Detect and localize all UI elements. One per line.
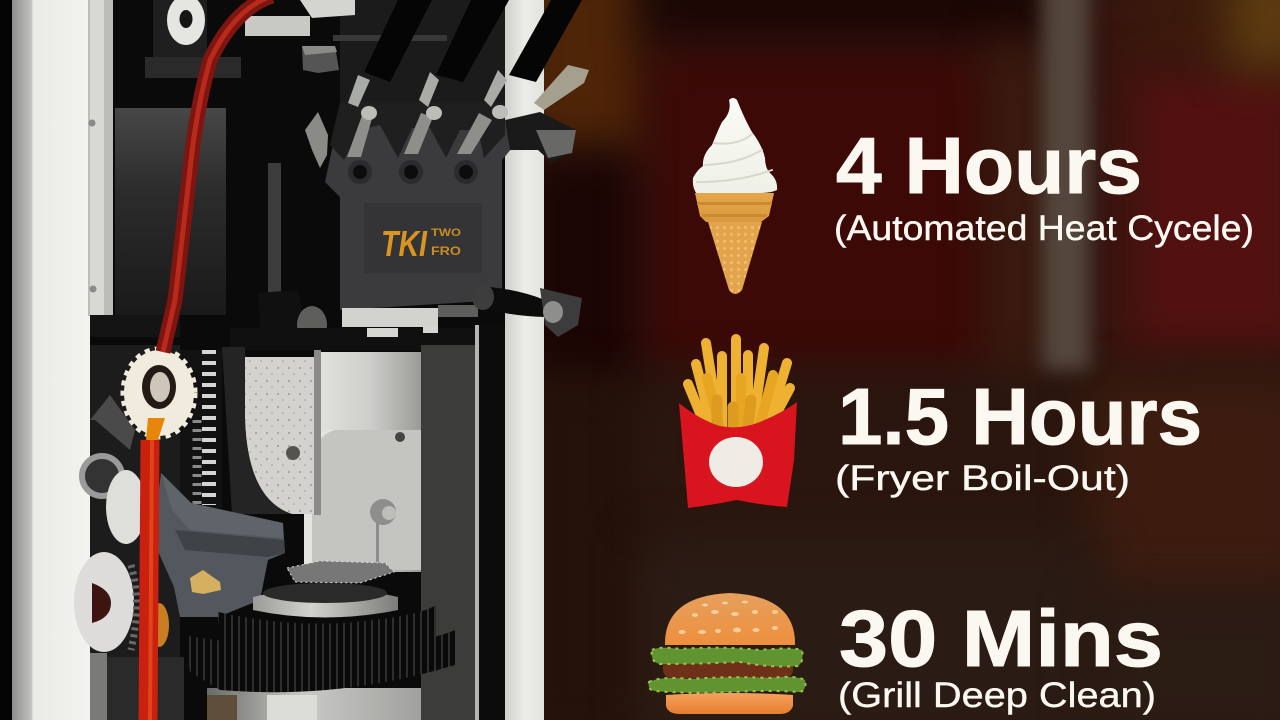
- row 1: ice cream cone and 4 hours: [693, 98, 1254, 294]
- row 3: burger and 30 mins: [649, 593, 1163, 715]
- right dark channel: [421, 325, 505, 720]
- machine interior: [0, 0, 505, 720]
- black handles: [364, 0, 582, 82]
- white top bearing: [167, 0, 205, 45]
- caption: grill deep clean: (Grill Deep Clean): [838, 676, 1156, 715]
- top-right lever: [534, 65, 589, 110]
- small golden nut: [190, 570, 221, 594]
- stat: 30 Mins: 30 Mins: [839, 594, 1163, 683]
- soft-serve machine: [0, 0, 589, 720]
- back panel: [115, 0, 505, 315]
- brand logo mark: FRO: [431, 244, 461, 258]
- brand logo mark: TWO: [431, 227, 462, 239]
- lower left gear disc: [74, 552, 184, 720]
- white sprocket: [124, 350, 194, 440]
- left gears cluster: [82, 345, 180, 720]
- caption: fryer boil-out: (Fryer Boil-Out): [835, 459, 1130, 498]
- brand logo mark: TKI: [381, 223, 428, 264]
- chain column: [176, 350, 222, 508]
- silver panel: [304, 352, 421, 572]
- dispensing head: [325, 102, 512, 310]
- red tube: [148, 0, 272, 720]
- caption: automated heat cycle: (Automated Heat Cycele): [834, 209, 1254, 248]
- right post: [505, 0, 544, 720]
- icon: soft-serve cone: [693, 98, 777, 294]
- left valve knob: [305, 112, 328, 168]
- right valve knob: [505, 112, 576, 163]
- speckled filter panel: [222, 347, 321, 515]
- stat: 1.5 Hours: 1.5 Hours: [838, 372, 1202, 461]
- row 2: fries and 1.5 hours: [679, 339, 1202, 508]
- icon: fries box: [679, 339, 797, 508]
- grey arm bracket: [153, 473, 285, 617]
- metal drum and gears: [184, 561, 455, 720]
- lower bar with knobs: [90, 284, 582, 350]
- stat: 4 Hours: 4 Hours: [836, 121, 1142, 210]
- lever grips: [305, 65, 589, 168]
- left post: [0, 0, 113, 720]
- icon: burger: [649, 593, 805, 714]
